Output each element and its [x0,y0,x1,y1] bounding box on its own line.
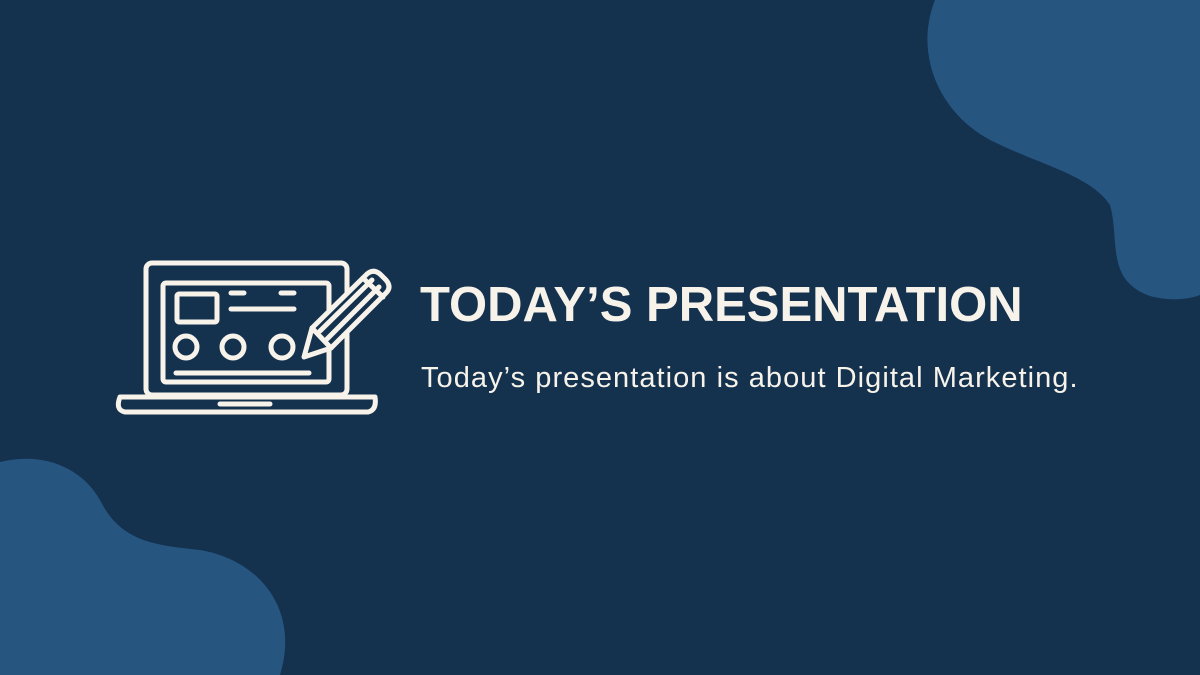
subtitle: Today’s presentation is about Digital Marketing. [421,362,1079,394]
icon: laptop with pencil [116,260,392,414]
blob: bottom left [0,459,285,675]
blob: top right [927,0,1200,299]
title: TODAY’S PRESENTATION [420,278,1023,332]
